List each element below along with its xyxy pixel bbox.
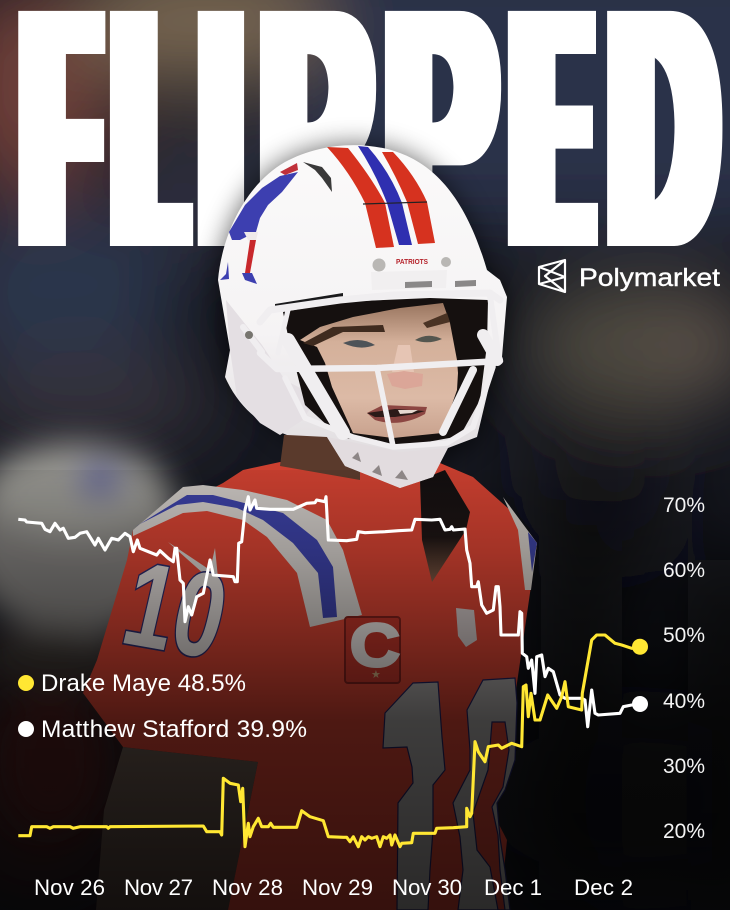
line: Matthew Stafford xyxy=(18,497,640,727)
y axis labels: 30% xyxy=(663,755,705,778)
title: FLIPPED xyxy=(27,0,715,315)
collar opening xyxy=(420,470,470,582)
x axis labels xyxy=(34,875,633,900)
shoulder stripes xyxy=(133,485,362,627)
nose xyxy=(392,345,414,372)
end marker: Drake Maye xyxy=(632,639,648,655)
y axis labels: 20% xyxy=(663,820,705,843)
front bumper with snaps and team name: PATRIOTS xyxy=(396,257,428,266)
right shoulder seam xyxy=(503,497,537,590)
helmet shell xyxy=(218,145,507,488)
arm xyxy=(96,747,258,910)
y axis labels: 50% xyxy=(663,624,705,647)
wordmark: Polymarket xyxy=(579,264,720,292)
icon: Polymarket logo xyxy=(539,260,565,292)
NFL shield xyxy=(456,608,477,647)
face xyxy=(300,303,458,438)
x axis labels: Nov 30 xyxy=(392,875,462,900)
x axis labels: Dec 2 xyxy=(574,875,633,900)
chest number fabric panels xyxy=(383,678,517,910)
x axis labels: Dec 1 xyxy=(484,875,542,900)
player: body and jersey xyxy=(0,435,730,910)
x axis labels: Nov 28 xyxy=(212,875,283,900)
side jaw pad xyxy=(226,300,317,435)
brows xyxy=(303,325,385,346)
face opening xyxy=(283,298,488,447)
legend xyxy=(18,670,307,743)
end marker: Matthew Stafford xyxy=(632,696,648,712)
x axis labels: Nov 26 xyxy=(34,875,105,900)
jersey xyxy=(83,462,537,910)
price chart xyxy=(18,494,705,900)
y axis labels: 70% xyxy=(663,494,705,517)
y axis labels xyxy=(663,494,705,843)
sleeve number 10: 10 xyxy=(112,537,239,685)
legend: Matthew Stafford: Matthew Stafford 39.9% xyxy=(41,716,307,743)
helmet drop shadow on title xyxy=(218,145,507,488)
y axis labels: 60% xyxy=(663,559,705,582)
helmet vent xyxy=(303,162,332,192)
brand: Polymarket logo and wordmark xyxy=(539,260,720,292)
neck xyxy=(280,435,360,480)
chin guard xyxy=(327,437,447,488)
x axis labels: Nov 27 xyxy=(124,875,193,900)
mouth xyxy=(367,405,427,423)
chin guard vents xyxy=(352,452,408,480)
body shading xyxy=(0,470,730,910)
jersey swoosh xyxy=(168,542,218,578)
line: Drake Maye xyxy=(18,635,640,847)
eyes xyxy=(343,340,375,348)
legend: Drake Maye: Drake Maye 48.5% xyxy=(41,670,246,697)
x axis labels: Nov 29 xyxy=(302,875,373,900)
captain patch: C xyxy=(350,611,400,679)
y axis labels: 40% xyxy=(663,690,705,713)
helmet stripes xyxy=(327,146,435,248)
captain patch: ★ xyxy=(371,669,381,681)
helmet xyxy=(218,145,507,488)
front bumper with snaps and team name xyxy=(275,257,476,310)
facemask xyxy=(243,293,500,447)
helmet logo: Pat Patriot xyxy=(220,163,298,284)
